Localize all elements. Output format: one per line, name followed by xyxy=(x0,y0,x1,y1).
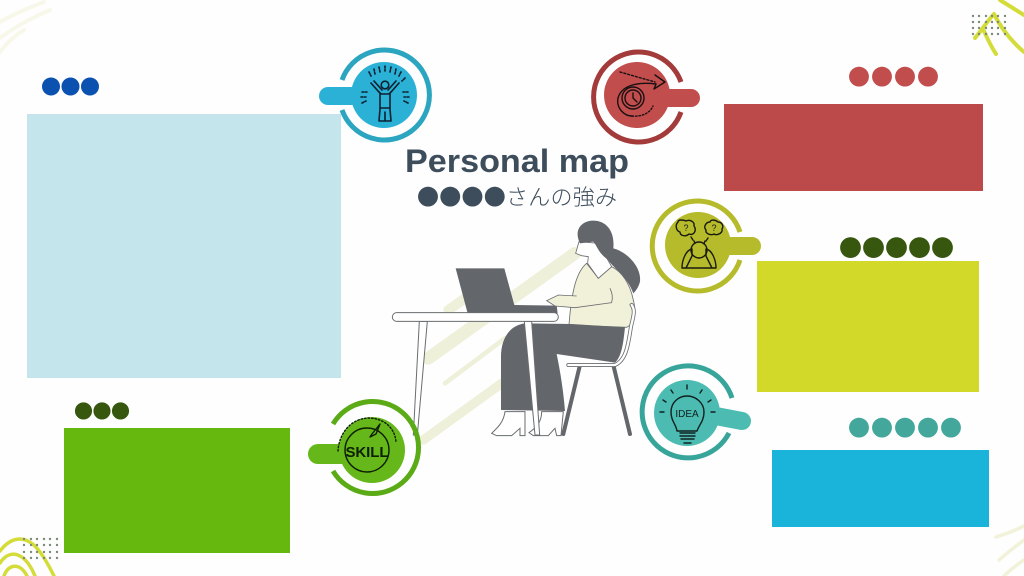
table xyxy=(392,313,558,435)
trousers xyxy=(501,323,625,411)
torso xyxy=(569,263,635,327)
panel: cyan box xyxy=(772,450,989,527)
panel: green box xyxy=(64,428,290,553)
icon: worried person badge: ? xyxy=(711,223,717,233)
chair xyxy=(568,305,634,365)
heading: teal box placeholder dots: ●●●●● xyxy=(848,411,962,443)
panel: light blue box xyxy=(27,114,341,378)
decoration: bottom-right pale scribble xyxy=(996,526,1024,576)
heading: green box placeholder dots: ●●● xyxy=(74,397,130,424)
illustration: woman working at laptop xyxy=(392,221,640,440)
icon: worried person badge: ? xyxy=(683,223,689,233)
icon: celebrating person badge xyxy=(319,50,429,140)
icon: skill target badge: SKILL xyxy=(346,444,388,461)
icon: clock with arrow badge xyxy=(594,52,700,142)
icon: idea light bulb badge xyxy=(642,366,742,458)
icon: worried person badge xyxy=(652,201,761,291)
laptop xyxy=(456,268,558,313)
decoration: top-right dots and scribble xyxy=(972,0,1024,54)
icon: skill target badge xyxy=(308,402,419,494)
title: Personal map xyxy=(405,143,629,179)
heading: yellow box placeholder dots: ●●●●● xyxy=(839,229,954,263)
subtitle: ●●●●さんの強み xyxy=(417,180,617,212)
face and neck xyxy=(576,242,612,278)
heading: red box placeholder dots: ●●●● xyxy=(848,60,939,92)
panel: yellow box xyxy=(757,261,979,392)
shoes xyxy=(492,412,563,436)
decoration: top-left pale scribble xyxy=(0,2,50,52)
heading: blue box placeholder dots: ●●● xyxy=(41,71,100,100)
arm and hand xyxy=(547,288,612,308)
hair xyxy=(578,221,640,293)
chair legs xyxy=(563,365,630,434)
panel: red box xyxy=(724,104,983,191)
background brush strokes xyxy=(423,253,575,440)
decoration: bottom-left concentric scribble and dots xyxy=(0,538,58,576)
icon: idea light bulb badge: IDEA xyxy=(675,409,699,420)
